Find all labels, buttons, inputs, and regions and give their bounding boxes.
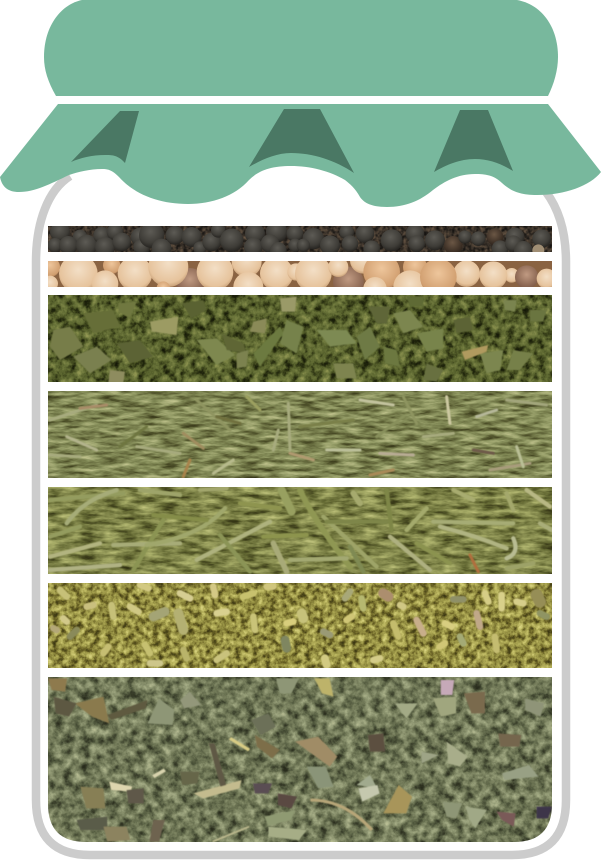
layer: white peppercorns [48, 261, 552, 287]
layer: thyme needles [48, 391, 552, 478]
fold: right [434, 110, 513, 172]
cloth top [44, 0, 558, 96]
layer: chopped green herb [48, 295, 552, 383]
layer: black peppercorns [48, 226, 552, 252]
jar outline [36, 176, 566, 855]
fold: left [71, 111, 139, 163]
cloth skirt [0, 104, 601, 207]
layer: rosemary needles [48, 487, 552, 574]
layer: yellow oregano [48, 583, 552, 668]
fold: middle [249, 109, 354, 173]
cloth lid [0, 0, 601, 207]
layer: mixed basil leaves [19, 677, 552, 842]
